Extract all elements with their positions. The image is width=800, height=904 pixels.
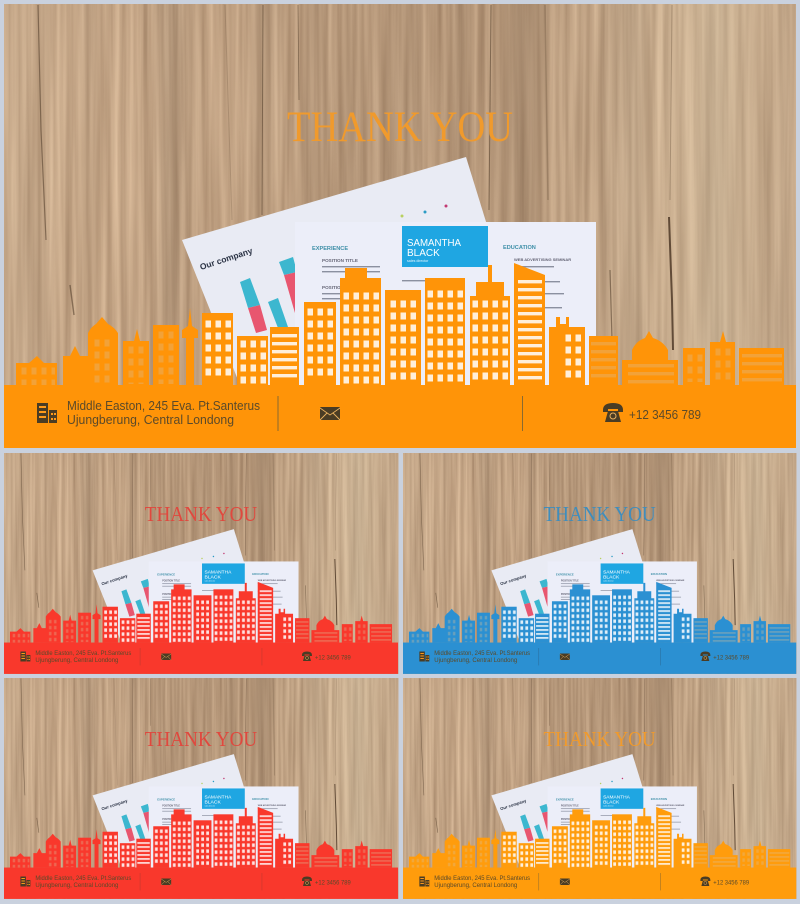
panel: second orange slide — [403, 678, 796, 899]
phone number: +12 3456 789 — [315, 654, 351, 661]
contact band — [4, 868, 398, 899]
city skyline — [10, 582, 392, 643]
address: Middle Easton, 245 Eva. Pt.Santerus — [434, 875, 530, 882]
title: THANK YOU — [544, 502, 656, 526]
wood background with papers — [4, 678, 398, 899]
panel: main orange slide — [4, 4, 796, 448]
icon: telephone — [603, 403, 623, 422]
address: Middle Easton, 245 Eva. Pt.Santerus — [67, 399, 260, 413]
icon: building — [419, 877, 429, 886]
wood background with papers — [4, 453, 398, 674]
icon: telephone — [700, 877, 710, 886]
contact band — [403, 643, 796, 674]
address — [67, 399, 260, 427]
icon: telephone — [302, 652, 312, 661]
icon: building — [20, 652, 30, 661]
address: Ujungberung, Central Londong — [434, 882, 518, 889]
phone number: +12 3456 789 — [629, 408, 701, 422]
contact band — [4, 643, 398, 674]
icon: envelope — [161, 878, 171, 885]
panel: blue slide — [403, 453, 796, 674]
wood background with papers — [4, 4, 796, 448]
address — [434, 650, 530, 664]
title: THANK YOU — [287, 104, 513, 151]
icon: envelope — [560, 653, 570, 660]
address: Ujungberung, Central Londong — [35, 657, 119, 664]
title: THANK YOU — [145, 502, 257, 526]
address: Middle Easton, 245 Eva. Pt.Santerus — [35, 650, 131, 657]
contact band — [403, 868, 796, 899]
city skyline — [409, 582, 790, 643]
icon: telephone — [700, 652, 710, 661]
icon: building — [20, 877, 30, 886]
icon: envelope — [161, 653, 171, 660]
icon: envelope — [560, 878, 570, 885]
city skyline — [409, 807, 790, 868]
icon: envelope — [320, 407, 340, 420]
contact band — [4, 385, 796, 448]
wood background with papers — [403, 678, 796, 899]
wood background with papers — [403, 453, 796, 674]
phone number: +12 3456 789 — [315, 879, 351, 886]
address: Ujungberung, Central Londong — [434, 657, 518, 664]
icon: building — [37, 403, 57, 423]
phone number: +12 3456 789 — [713, 879, 750, 886]
address — [35, 650, 131, 664]
phone number: +12 3456 789 — [713, 654, 750, 661]
panel: red slide — [4, 453, 398, 674]
city skyline — [10, 807, 392, 868]
address — [35, 875, 131, 889]
address: Middle Easton, 245 Eva. Pt.Santerus — [434, 650, 530, 657]
title: THANK YOU — [544, 727, 656, 751]
address: Ujungberung, Central Londong — [67, 413, 234, 427]
address — [434, 875, 530, 889]
panel: second red slide — [4, 678, 398, 899]
icon: building — [419, 652, 429, 661]
city skyline — [16, 263, 784, 386]
title: THANK YOU — [145, 727, 257, 751]
icon: telephone — [302, 877, 312, 886]
address: Ujungberung, Central Londong — [35, 882, 119, 889]
address: Middle Easton, 245 Eva. Pt.Santerus — [35, 875, 131, 882]
